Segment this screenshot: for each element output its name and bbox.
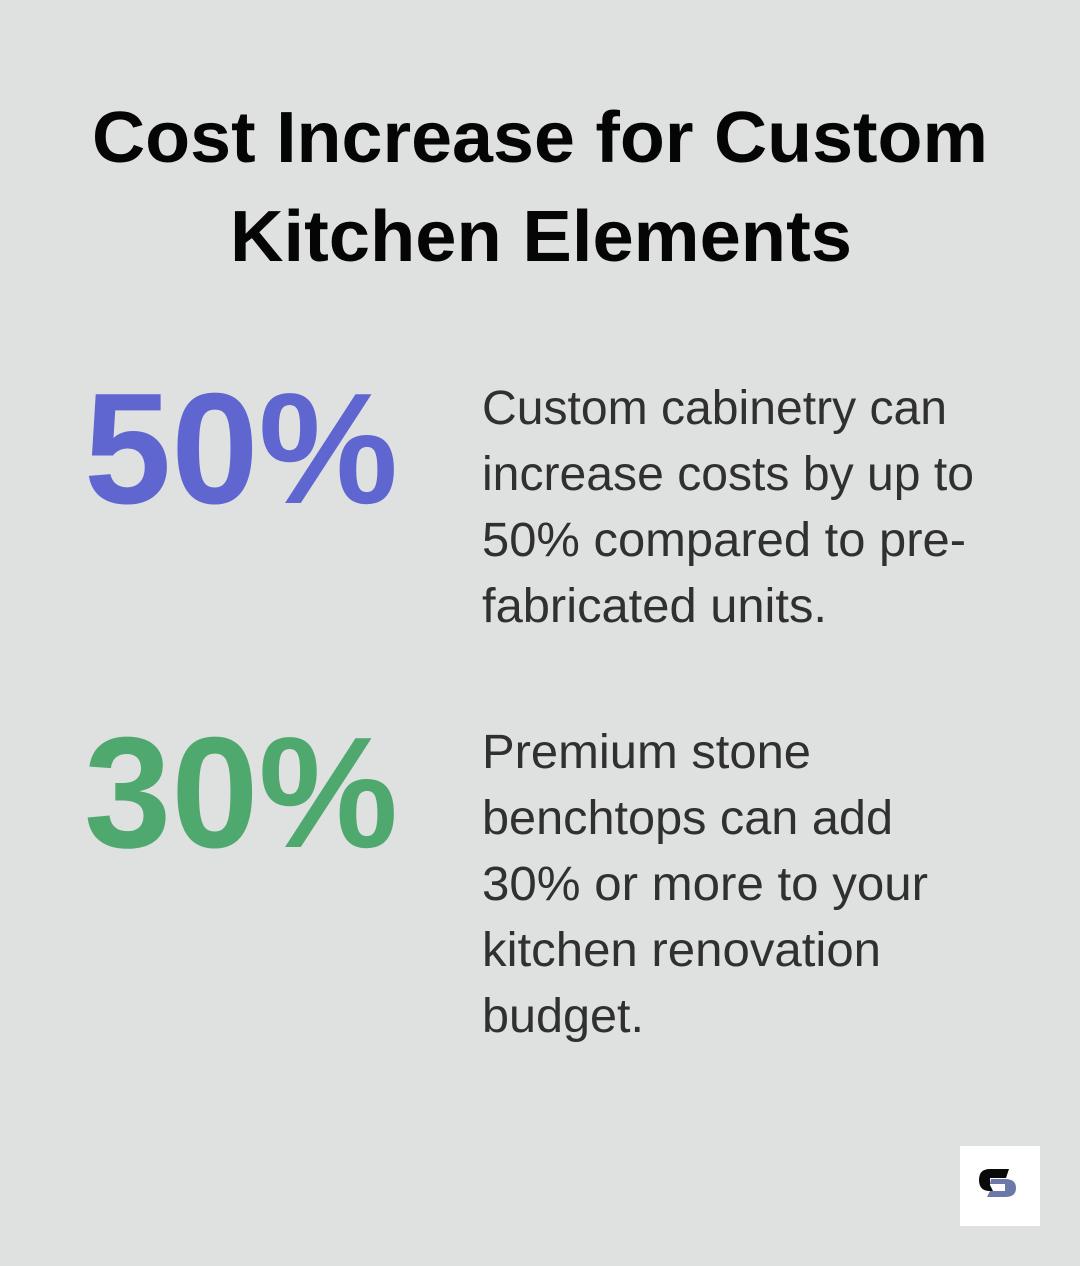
title: Cost Increase for Custom: [92, 98, 988, 178]
description: premium stone benchtops: budget.: [482, 990, 644, 1043]
stat: 30%: 30%: [84, 705, 398, 881]
description: custom cabinetry: Custom cabinetry can: [482, 382, 947, 435]
description: premium stone benchtops: [482, 726, 928, 1043]
stat: 50%: 50%: [84, 361, 398, 537]
description: custom cabinetry: [482, 382, 974, 633]
title: [92, 98, 988, 277]
description: premium stone benchtops: kitchen renovation: [482, 924, 881, 977]
title: Kitchen Elements: [230, 197, 852, 277]
description: premium stone benchtops: Premium stone: [482, 726, 811, 779]
description: premium stone benchtops: 30% or more to your: [482, 858, 928, 911]
description: custom cabinetry: fabricated units.: [482, 580, 827, 633]
description: custom cabinetry: 50% compared to pre-: [482, 514, 966, 567]
logo badge: [960, 1146, 1040, 1226]
description: premium stone benchtops: benchtops can add: [482, 792, 893, 845]
description: custom cabinetry: increase costs by up to: [482, 448, 974, 501]
